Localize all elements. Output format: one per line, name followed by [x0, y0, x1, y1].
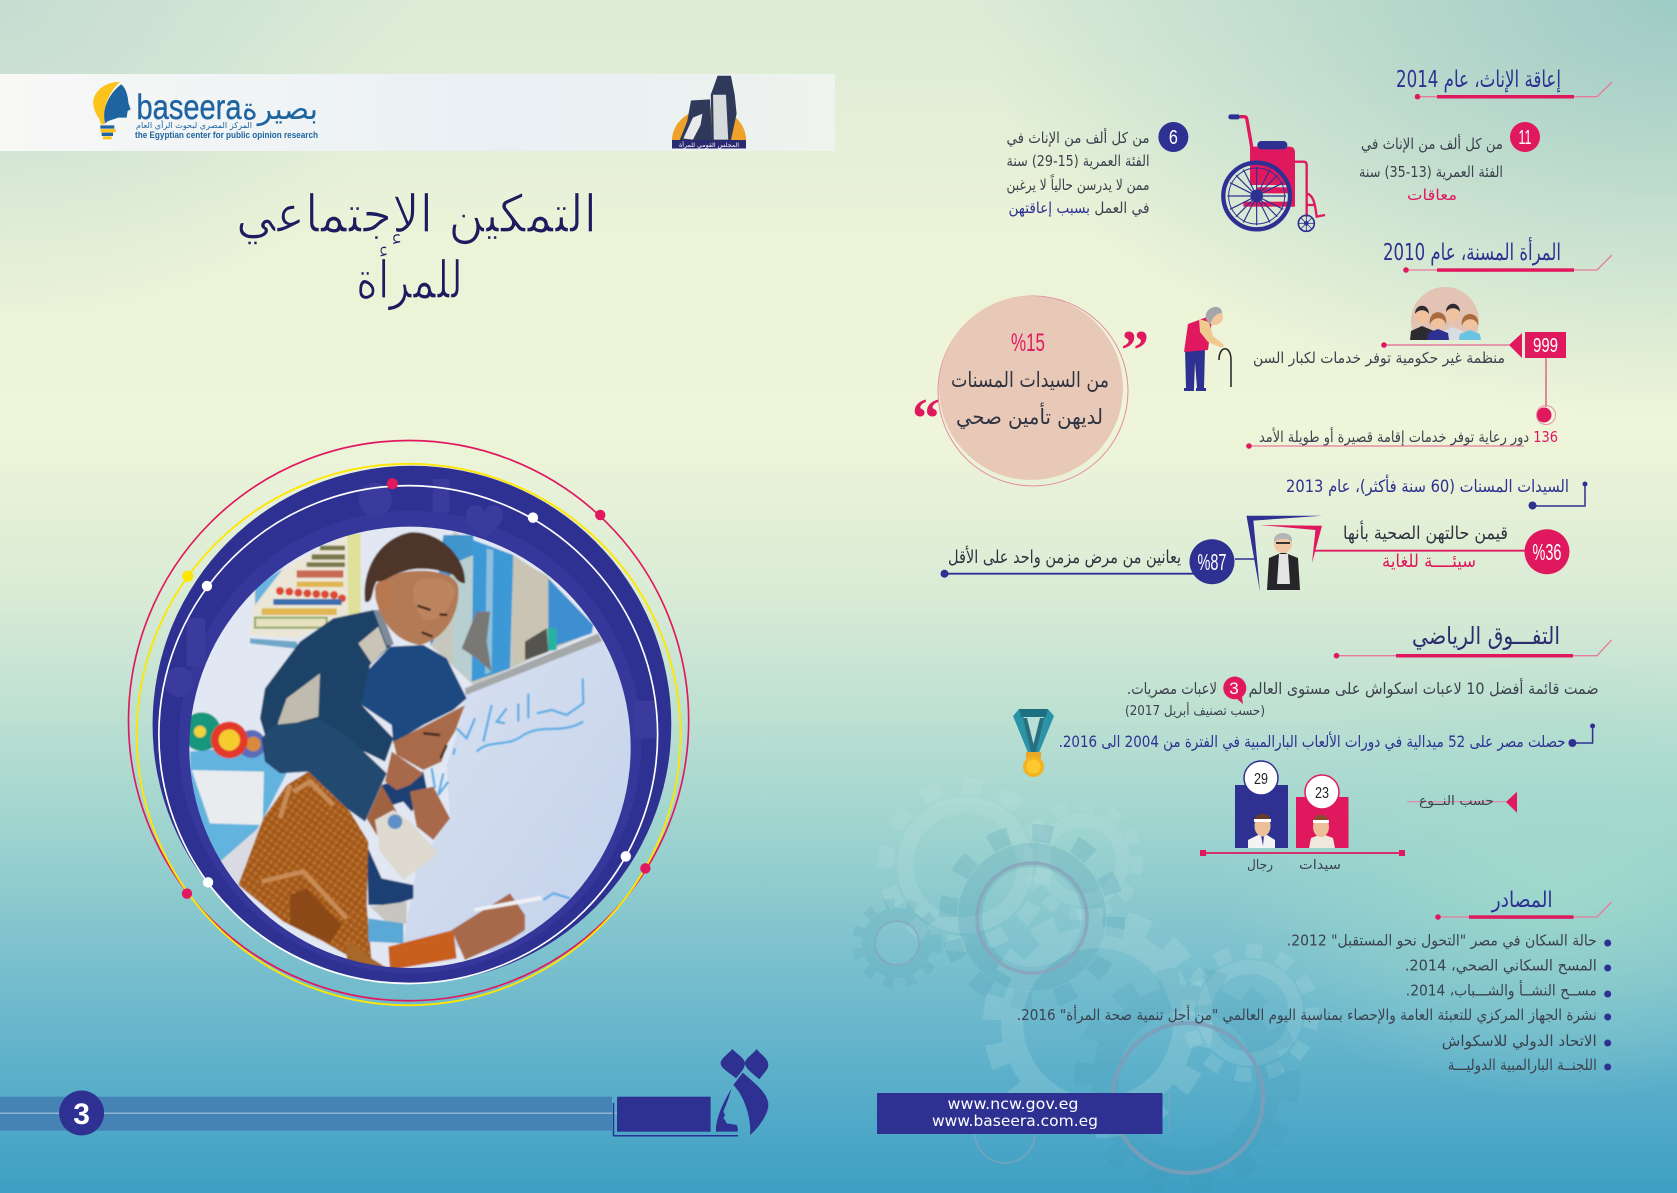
woman's face: [393, 705, 465, 770]
rings and blue disc: [129, 441, 689, 1005]
decorative gears: [857, 786, 1312, 1184]
leg, foot and hands: [367, 785, 397, 835]
stat 6: ممن لا يدرسن حالياً لا يرغبن: [1006, 174, 1150, 194]
callout: 15 percent health insurance: %15: [1011, 329, 1045, 357]
stat 36: قيمن حالتهن الصحية بأنها: [1343, 520, 1508, 544]
child's leg: [262, 720, 387, 822]
logo: baseera: the Egyptian center for public opinion research: [135, 130, 318, 140]
quote marks: ”: [1121, 320, 1149, 382]
stat 6: في العمل بسبب إعاقتهن: [1008, 199, 1150, 218]
heading: المصادر: [1491, 888, 1553, 913]
logo: baseera: baseera: [136, 88, 242, 127]
callout: 15 percent health insurance: [912, 296, 1149, 486]
circular photo with rings: [129, 441, 689, 1005]
stat 136: 136 دور رعاية توفر خدمات إقامة قصيرة أو طويلة الأمد: [1259, 427, 1558, 446]
section: sports excellence: [1013, 622, 1612, 873]
page number: [59, 1090, 104, 1136]
heading: المرأة المسنة، عام 2010: [1383, 237, 1561, 266]
gender bar chart: [1200, 761, 1405, 873]
bullets list: الاتحاد الدولي للاسكواش: [1442, 1032, 1597, 1051]
stat 6: من كل ألف من الإناث في: [1006, 128, 1150, 148]
logo: baseera: المركز المصري لبحوث الرأي العام: [136, 120, 252, 130]
stat 36: [1315, 520, 1570, 574]
stat 6: [1006, 122, 1188, 218]
icon: bulb head: [93, 82, 131, 139]
heading: [1334, 622, 1612, 658]
stat 11: معاقات: [1407, 186, 1457, 204]
squash text with badge: [1125, 677, 1599, 719]
section: elderly woman 2010: [912, 237, 1612, 486]
paralympics text: حصلت مصر على 52 ميدالية في دورات الألعاب البارالمبية في الفترة من 2004 الى 2016.: [1059, 731, 1566, 752]
sleeve and writing hand: [388, 930, 457, 970]
bullets list: المسح السكاني الصحي، 2014.: [1405, 957, 1597, 976]
stat 36: %36: [1532, 539, 1562, 565]
heading: التفـــوق الرياضي: [1412, 622, 1560, 650]
photo: [182, 525, 633, 972]
icon: ta marbuta logo: [716, 1049, 768, 1135]
stat 87: [940, 539, 1256, 584]
stat 11: 11: [1518, 127, 1532, 149]
whiteboard: [403, 640, 633, 955]
wall details: [190, 745, 287, 862]
stat 87: %87: [1198, 549, 1226, 575]
stat 36: سيئــــة للغاية: [1382, 551, 1476, 572]
bullets list: حالة السكان في مصر "التحول نحو المستقبل" 2012.: [1287, 932, 1597, 951]
logo: national council for women: [672, 76, 746, 149]
bar: women 23: [1296, 775, 1348, 848]
squash text with badge: ضمت قائمة أفضل 10 لاعبات اسكواش على مستوى العالم: [1249, 678, 1599, 699]
stat 136: [1246, 358, 1558, 449]
stat 87: يعانين من مرض مزمن واحد على الأقل: [948, 546, 1181, 568]
lower scarf: [367, 772, 427, 905]
stat 999: 999: [1533, 335, 1558, 357]
writing on board: [432, 678, 583, 900]
logo: baseera: [93, 82, 318, 140]
stat 6: الفئة العمرية (15-29) سنة: [1006, 152, 1150, 170]
logo: baseera: بصيرة: [242, 92, 318, 127]
main title: للمرأة: [356, 246, 463, 311]
heading: إعاقة الإناث، عام 2014: [1396, 67, 1561, 93]
window and shelves: [430, 532, 593, 685]
page number: 3: [73, 1098, 90, 1131]
callout: 15 percent health insurance: من السيدات المسنات: [951, 368, 1109, 392]
bullets list: مســح النشــأ والشـــباب، 2014.: [1406, 980, 1597, 1000]
paralympics text: [1059, 724, 1595, 752]
main title: [236, 185, 597, 311]
section: older women 60+ 2013: [940, 474, 1588, 592]
header band with logos: [0, 74, 835, 151]
squash text with badge: لاعبات مصريات.: [1127, 679, 1217, 699]
blue tab: [614, 1097, 738, 1136]
icon: elderly person: [1267, 533, 1300, 590]
website box: www.ncw.gov.eg: [948, 1095, 1078, 1113]
bullets list: نشرة الجهاز المركزي للتعبئة العامة والإحصاء بمناسبة اليوم العالمي "من أجل تنمية صحة المرأة" 2016.: [1017, 1005, 1597, 1025]
hijab: [362, 645, 467, 743]
ring dots: [182, 478, 651, 899]
squash text with badge: 3: [1229, 679, 1239, 698]
stat 11: [1359, 122, 1540, 204]
bar: men 29: 29: [1254, 771, 1268, 788]
icon: wheelchair: [1223, 114, 1325, 231]
subheading: السيدات المسنات (60 سنة فأكثر)، عام 2013: [1286, 474, 1569, 497]
section: female disability 2014: [1006, 67, 1612, 231]
child's torso: [260, 610, 393, 762]
callout: 15 percent health insurance: لديهن تأمين صحي: [956, 402, 1103, 429]
website box: www.baseera.com.eg: [932, 1112, 1098, 1130]
footer band and page number: [0, 1049, 768, 1136]
squash text with badge: (حسب تصنيف أبريل 2017): [1125, 702, 1265, 719]
stat 999: [1253, 332, 1566, 367]
callout: 15 percent health insurance: “: [912, 388, 940, 450]
subheading: [1286, 474, 1588, 510]
heading: [1435, 888, 1612, 920]
gender bar chart: سيدات: [1299, 858, 1341, 873]
stat 6: 6: [1169, 127, 1178, 149]
stat 999: منظمة غير حكومية توفر خدمات لكبار السن: [1253, 349, 1505, 367]
bullets list: [1017, 932, 1611, 1074]
bar: women 23: 23: [1315, 785, 1329, 802]
dress: [238, 772, 372, 962]
stat 11: الفئة العمرية (13-35) سنة: [1359, 163, 1503, 181]
section: sources: [1017, 888, 1612, 1074]
icon: people group: [1410, 287, 1481, 340]
stat 11: من كل ألف من الإناث في: [1361, 134, 1503, 154]
poster: [249, 536, 349, 638]
bullets list: اللجنــة البارالمبية الدوليـــة: [1448, 1056, 1597, 1074]
icon: elderly woman with cane: [1184, 307, 1231, 391]
gender label: [1407, 792, 1517, 813]
icon: medal: [1013, 709, 1054, 777]
bar: men 29: [1235, 761, 1288, 848]
child's head: [373, 610, 394, 646]
main title: التمكين الإجتماعي: [236, 185, 597, 245]
frame: [1246, 516, 1322, 592]
logo: national council for women: المجلس القومي للمرأة: [679, 141, 739, 149]
gender label: حسب النــوع: [1419, 794, 1494, 809]
gender bar chart: رجال: [1247, 858, 1273, 873]
website box: [877, 1093, 1162, 1134]
